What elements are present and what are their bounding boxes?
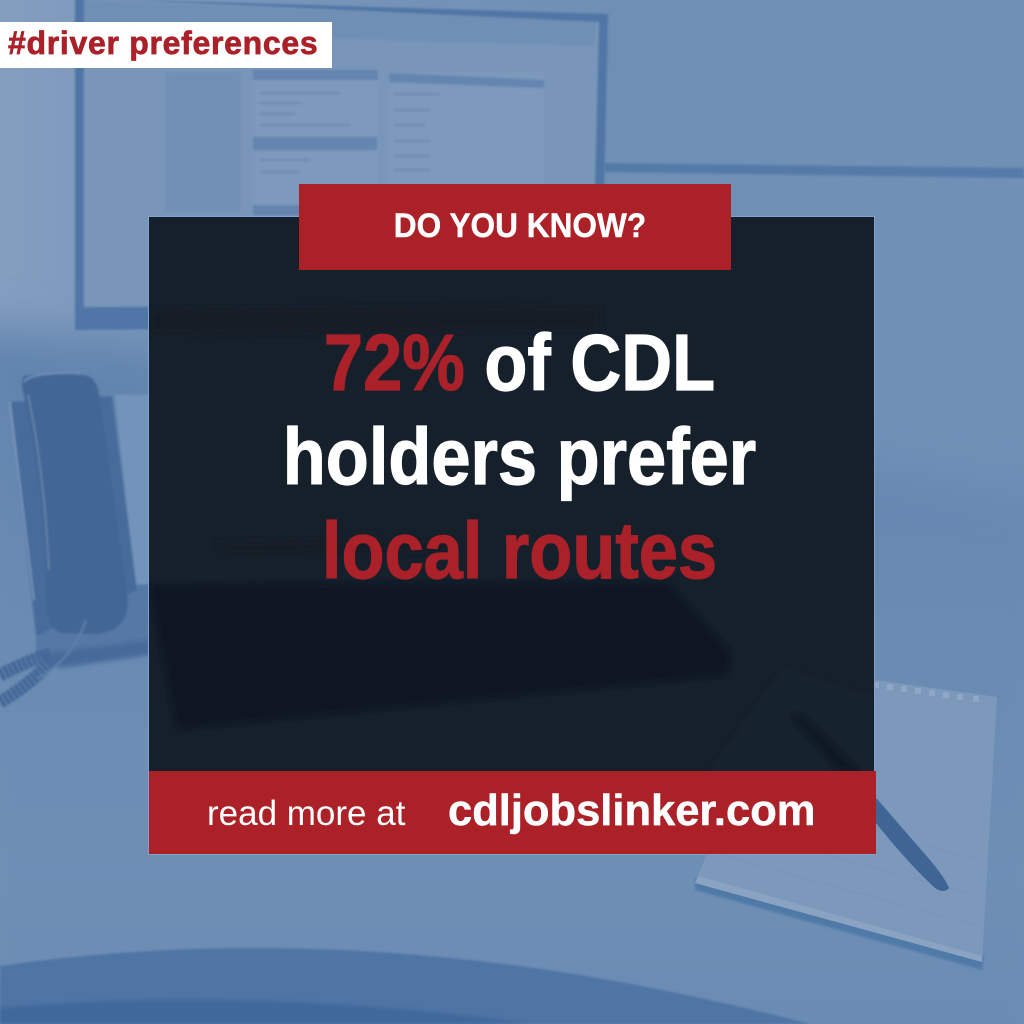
hashtag text: #driver preferences — [8, 25, 318, 61]
footer bar: website link — [149, 771, 876, 854]
screen window content — [165, 70, 544, 215]
main statistic headline: holders prefer — [283, 412, 756, 501]
panel: dark statistic card — [149, 217, 874, 854]
phone — [0, 373, 150, 702]
banner: do you know — [299, 184, 731, 270]
banner heading: DO YOU KNOW? — [394, 207, 646, 245]
pen — [870, 792, 949, 891]
wall partition lines — [604, 163, 1024, 178]
hashtag label — [0, 22, 332, 68]
read more text: read more at — [207, 794, 405, 833]
desk surface — [0, 325, 1024, 1024]
website url: cdljobslinker.com — [448, 787, 815, 835]
faint desk objects seen through the panel — [149, 582, 858, 771]
main statistic headline: 72% of CDL — [324, 318, 715, 407]
main statistic headline: local routes — [322, 506, 717, 595]
main statistic headline — [283, 318, 756, 595]
monitor frame and screen — [75, 0, 608, 330]
chair arc — [0, 948, 810, 1024]
notepad — [695, 667, 997, 970]
